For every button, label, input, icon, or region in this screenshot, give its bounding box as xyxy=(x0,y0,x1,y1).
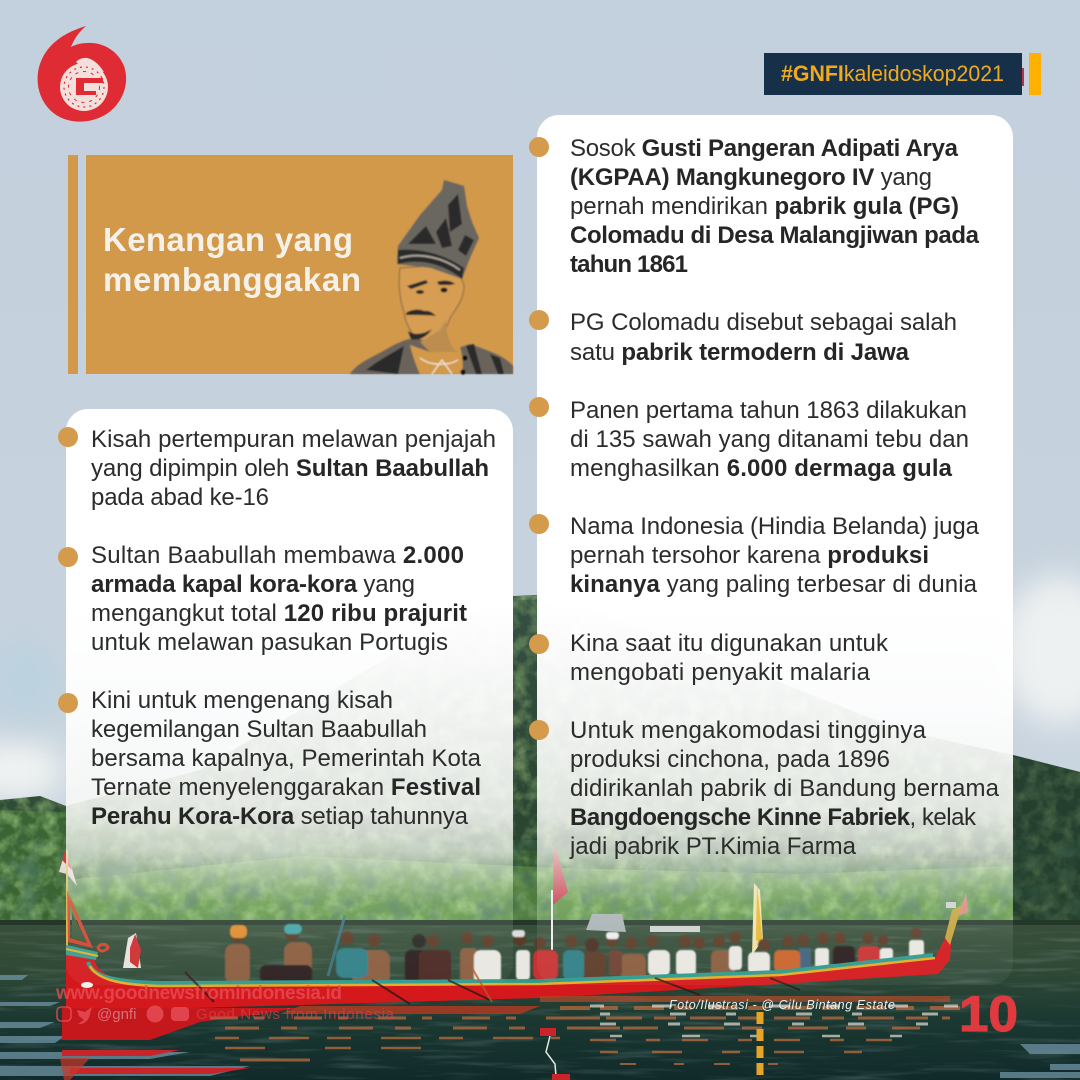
text: Sultan Baabullah war: Kisah pertempuran melawan penjajah xyxy=(91,426,496,453)
website url: www.goodnewsfromindonesia.id xyxy=(55,983,342,1004)
text: Festival Perahu Kora-Kora: bersama kapalnya, Pemerintah Kota xyxy=(91,745,482,772)
text: 2.000 kora-kora fleet: armada kapal kora-kora yang xyxy=(91,571,415,598)
text: malaria: Kina saat itu digunakan untuk xyxy=(570,630,889,657)
text: modern factory: PG Colomadu disebut sebagai salah xyxy=(570,309,957,336)
text: Festival Perahu Kora-Kora: Kini untuk mengenang kisah xyxy=(91,687,393,714)
text: Festival Perahu Kora-Kora xyxy=(91,687,482,830)
text: PG Colomadu founding: (KGPAA) Mangkunegoro IV yang xyxy=(570,164,932,191)
footer: website and socials xyxy=(55,983,395,1024)
text: 2.000 kora-kora fleet: untuk melawan pasukan Portugis xyxy=(91,629,448,656)
text: first harvest: di 135 sawah yang ditanami tebu dan xyxy=(570,426,969,453)
text: Bandung factory: didirikanlah pabrik di Bandung bernama xyxy=(570,775,1000,802)
text: malaria xyxy=(570,630,889,686)
text: Festival Perahu Kora-Kora: Perahu Kora-Kora setiap tahunnya xyxy=(91,803,469,830)
page number: 10 xyxy=(959,986,1018,1042)
text: Bandung factory: produksi cinchona, pada 1896 xyxy=(570,746,890,773)
logo: GNFI red speech mark xyxy=(38,26,126,122)
text: Bandung factory xyxy=(569,717,1000,860)
text: PG Colomadu founding xyxy=(570,135,980,278)
text: first harvest xyxy=(570,397,969,482)
social handles: @gnfi xyxy=(97,1006,136,1023)
boat flags and mast xyxy=(59,842,968,955)
text: 2.000 kora-kora fleet xyxy=(91,542,467,656)
text: first harvest: menghasilkan 6.000 dermaga gula xyxy=(570,455,953,482)
background ships on far shore xyxy=(586,914,626,932)
rowers xyxy=(225,924,924,986)
text: Bandung factory: Bangdoengsche Kinne Fabriek, kelak xyxy=(570,804,977,831)
photo credit: Foto/Ilustrasi - @ Cilu Bintang Estate xyxy=(669,998,895,1012)
text: PG Colomadu founding: pernah mendirikan pabrik gula (PG) xyxy=(570,193,959,220)
water reflections of the boat xyxy=(60,999,960,1080)
text: PG Colomadu founding: Colomadu di Desa Malangjiwan pada xyxy=(570,222,980,249)
text: Bandung factory: jadi pabrik PT.Kimia Farma xyxy=(569,833,857,860)
panel: left text card xyxy=(58,409,513,985)
text: Bandung factory: Untuk mengakomodasi tingginya xyxy=(570,717,927,744)
text: Sultan Baabullah war xyxy=(91,426,496,511)
text: PG Colomadu founding: tahun 1861 xyxy=(570,251,688,278)
title text: membanggakan xyxy=(103,261,361,298)
text: quinine production: Nama Indonesia (Hindia Belanda) juga xyxy=(570,513,980,540)
text: modern factory xyxy=(570,309,957,366)
hull xyxy=(66,890,962,1010)
text: Sultan Baabullah war: pada abad ke-16 xyxy=(91,484,269,511)
background photo: sky, mountain, lake xyxy=(0,563,1080,1080)
title text: Kenangan yang xyxy=(103,221,353,258)
portrait sketch of Sultan Baabullah xyxy=(350,180,513,375)
social icons xyxy=(57,1006,189,1024)
panel: right text card xyxy=(529,115,1013,985)
text: modern factory: satu pabrik termodern di Jawa xyxy=(570,339,910,366)
hashtag badge: #GNFIkaleidoskop2021 xyxy=(781,61,1004,86)
text: Festival Perahu Kora-Kora: kegemilangan Sultan Baabullah xyxy=(91,716,427,743)
text: quinine production: kinanya yang paling terbesar di dunia xyxy=(570,571,978,598)
text: 2.000 kora-kora fleet: mengangkut total 120 ribu prajurit xyxy=(91,600,467,627)
bullets xyxy=(58,427,78,713)
text: quinine production: pernah tersohor karena produksi xyxy=(570,542,929,569)
hashtag badge xyxy=(764,53,1041,95)
text: Festival Perahu Kora-Kora: Ternate menyelenggarakan Festival xyxy=(91,774,481,801)
title panel xyxy=(68,155,513,375)
boat: kora-kora with rowers xyxy=(59,842,968,1080)
oars xyxy=(185,915,800,1004)
text: 2.000 kora-kora fleet: Sultan Baabullah membawa 2.000 xyxy=(91,542,464,569)
bullets xyxy=(529,137,549,740)
text: PG Colomadu founding: Sosok Gusti Pangeran Adipati Arya xyxy=(570,135,959,162)
text: malaria: mengobati penyakit malaria xyxy=(570,659,871,686)
text: Sultan Baabullah war: yang dipimpin oleh Sultan Baabullah xyxy=(91,455,489,482)
text: first harvest: Panen pertama tahun 1863 dilakukan xyxy=(570,397,967,424)
footer: website and socials: Good News from Indonesia xyxy=(196,1006,395,1023)
text: quinine production xyxy=(570,513,980,598)
